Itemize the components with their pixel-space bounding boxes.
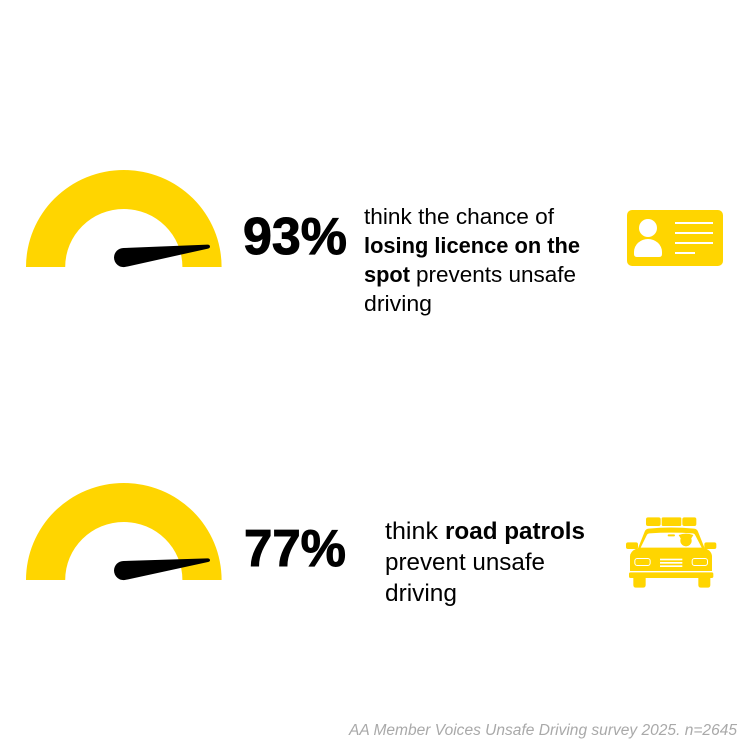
- description: licence: spot: [364, 262, 410, 287]
- percentage: 93%: 93%: [243, 208, 347, 266]
- icon: police car: [626, 517, 716, 588]
- gauge: 93%: [26, 170, 222, 267]
- description: licence: losing licence on the: [364, 233, 580, 258]
- gauge: 77%: [26, 483, 222, 580]
- description: licence: prevents unsafe: [416, 262, 576, 287]
- description: licence: think the chance of: [364, 204, 555, 229]
- percentage: 77%: 77%: [244, 520, 346, 578]
- description: licence: [364, 204, 580, 316]
- source note: AA Member Voices Unsafe Driving survey 2025. n=2645: [348, 722, 737, 739]
- panel: licence statistic: [26, 170, 723, 316]
- panel: road patrol statistic: [26, 483, 716, 607]
- description: road patrols: think: [385, 518, 439, 545]
- description: road patrols: [385, 518, 585, 607]
- icon: licence card: [627, 210, 723, 266]
- description: road patrols: prevent unsafe: [385, 549, 545, 576]
- description: licence: driving: [364, 291, 432, 316]
- description: road patrols: driving: [385, 580, 457, 607]
- description: road patrols: road patrols: [445, 518, 585, 545]
